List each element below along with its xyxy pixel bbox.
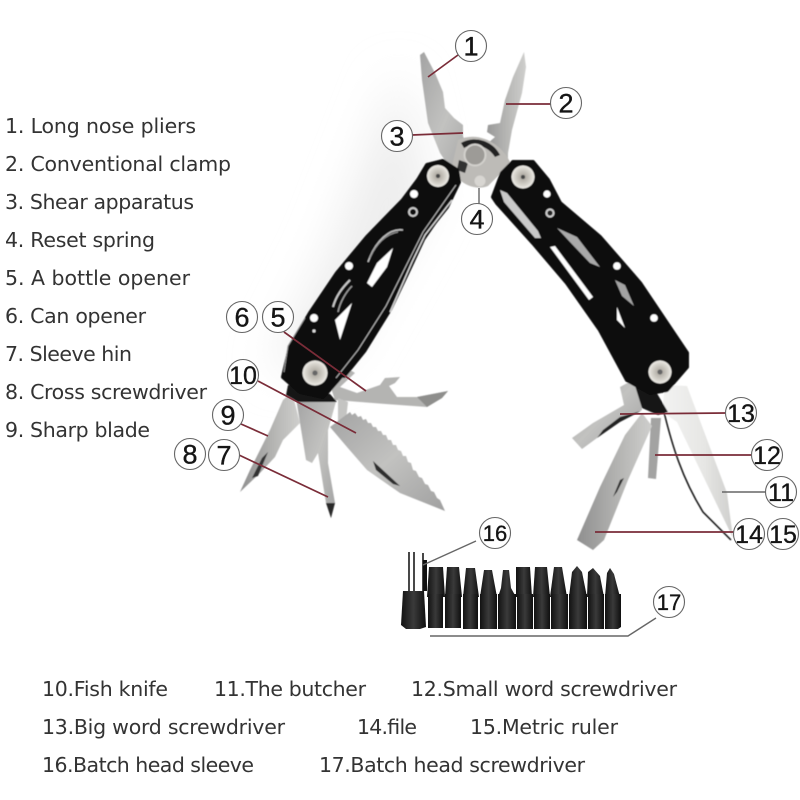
legend: parts 1 to 9: 2. Conventional clamp (5, 152, 231, 176)
number badge 4: 4 (469, 204, 485, 234)
right handle (493, 162, 687, 393)
sleeve pins (409, 552, 423, 591)
legend: parts 1 to 9: 8. Cross screwdriver (5, 380, 208, 404)
leader lines (239, 55, 766, 636)
legend: parts 1 to 9: 1. Long nose pliers (5, 114, 196, 138)
batch head bit set (401, 552, 621, 629)
legend: parts 1 to 9 (5, 114, 231, 442)
number badge 16 (480, 518, 510, 548)
handle screws and holes (427, 165, 449, 187)
number badge 15: 15 (769, 521, 797, 549)
legend: parts 10 to 17: 14.file (357, 715, 417, 739)
number badge 1 (456, 30, 486, 62)
number badge 17 (654, 586, 684, 618)
pivot plate (452, 137, 510, 188)
fish knife (330, 412, 445, 511)
number badge 7 (208, 440, 240, 470)
number badge 4 (462, 204, 492, 234)
number badge 3: 3 (389, 122, 405, 152)
number badge 10: 10 (229, 362, 257, 390)
number badge 7: 7 (216, 440, 232, 470)
butcher knife (662, 385, 733, 538)
legend: parts 1 to 9: 7. Sleeve hin (5, 342, 132, 366)
number badge 5 (262, 302, 294, 332)
number badge 9: 9 (220, 400, 236, 430)
number badge 12: 12 (753, 442, 781, 470)
bit heads (427, 567, 445, 597)
big screwdriver (572, 376, 642, 449)
pivot screw (464, 144, 486, 166)
number badge 14: 14 (735, 521, 763, 549)
legend: parts 10 to 17 (42, 677, 678, 777)
pliers (420, 52, 526, 188)
bit shanks (428, 594, 443, 628)
handle screws and holes (512, 166, 534, 188)
legend: parts 1 to 9: 9. Sharp blade (5, 418, 150, 442)
legend: parts 1 to 9: 5. A bottle opener (5, 266, 191, 290)
number badge 8 (174, 438, 206, 470)
number badge 11: 11 (768, 479, 794, 507)
number badge 2: 2 (558, 88, 574, 118)
number badge 16: 16 (483, 521, 507, 546)
left handle (283, 161, 459, 397)
left jaw (420, 52, 474, 180)
number badge 8: 8 (182, 440, 198, 470)
tool base (286, 385, 337, 402)
legend: parts 10 to 17: 10.Fish knife (42, 677, 168, 701)
sharp blade (240, 392, 300, 492)
multitool illustration (240, 52, 733, 550)
number badge 6 (226, 302, 258, 332)
legend: parts 10 to 17: 15.Metric ruler (470, 715, 619, 739)
file (577, 413, 652, 550)
right-hand folded tools (572, 376, 733, 550)
number badge 9 (212, 400, 244, 430)
left-hand folded tools (240, 368, 448, 518)
legend: parts 1 to 9: 4. Reset spring (5, 228, 155, 252)
tool base (632, 376, 668, 415)
number badge 1: 1 (463, 32, 479, 62)
silver insert (500, 190, 541, 238)
number badge 3 (382, 120, 412, 152)
number badge 13: 13 (727, 400, 755, 428)
number badge 5: 5 (270, 302, 286, 332)
legend: parts 1 to 9: 6. Can opener (5, 304, 147, 328)
cut-out windows (557, 228, 600, 267)
legend: parts 10 to 17: 11.The butcher (214, 677, 367, 701)
legend: parts 10 to 17: 16.Batch head sleeve (42, 753, 254, 777)
bottle opener (330, 368, 448, 407)
cut-out windows (367, 248, 393, 287)
right jaw (480, 52, 526, 170)
legend: parts 10 to 17: 12.Small word screwdriver (411, 677, 678, 701)
sleeve holder (401, 591, 426, 629)
cross screwdriver (296, 398, 337, 518)
number badge 17: 17 (657, 590, 681, 615)
legend: parts 10 to 17: 17.Batch head screwdriver (319, 753, 586, 777)
legend: parts 1 to 9: 3. Shear apparatus (5, 190, 194, 214)
number badge 2 (550, 88, 582, 118)
number badge 6: 6 (234, 302, 250, 332)
legend: parts 10 to 17: 13.Big word screwdriver (42, 715, 286, 739)
reset spring (474, 176, 486, 186)
small screwdriver (648, 418, 661, 479)
